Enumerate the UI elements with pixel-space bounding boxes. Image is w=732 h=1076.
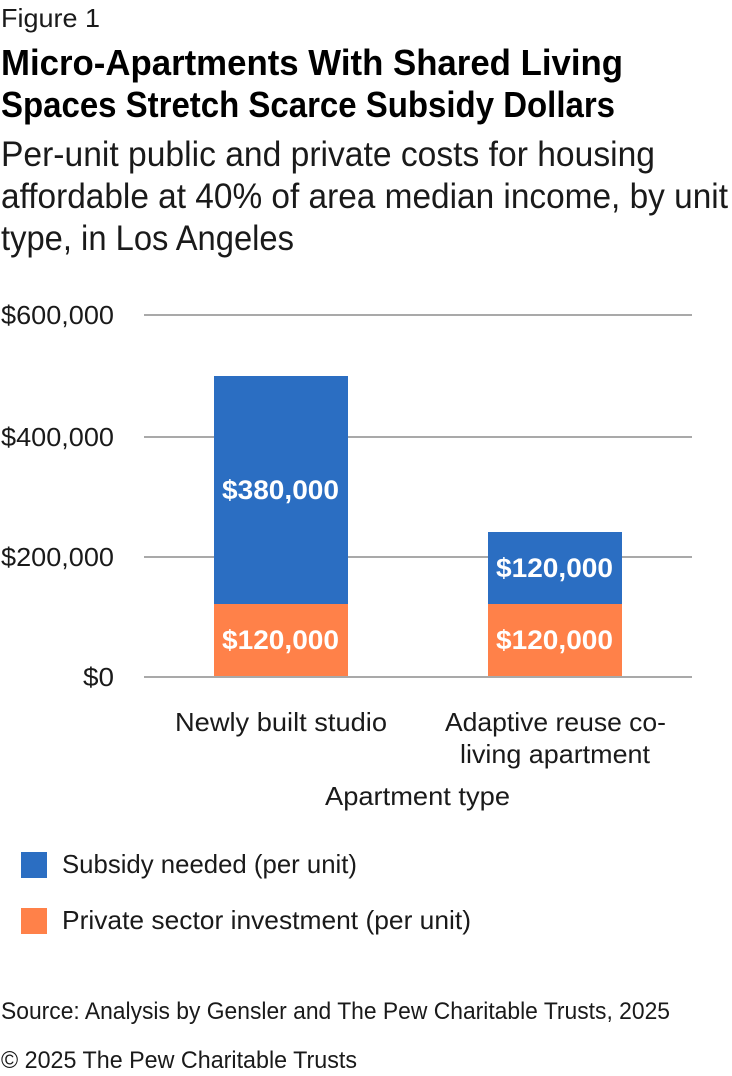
subtitle xyxy=(1,135,728,258)
legend xyxy=(21,849,471,935)
y-axis labels: $0 xyxy=(83,662,114,692)
x-axis title: Apartment type xyxy=(325,781,510,811)
bar: newly built studio: $380,000 xyxy=(222,475,339,505)
x-axis category labels: Adaptive reuse co- xyxy=(445,707,666,737)
subtitle: type, in Los Angeles xyxy=(1,219,294,258)
title: Micro-Apartments With Shared Living xyxy=(1,42,623,83)
y-axis labels: $200,000 xyxy=(1,542,114,572)
legend item: subsidy: Subsidy needed (per unit) xyxy=(62,849,357,879)
source note: Source: Analysis by Gensler and The Pew Charitable Trusts, 2025 xyxy=(1,998,670,1025)
x-axis category labels: living apartment xyxy=(460,739,651,769)
subtitle: Per-unit public and private costs for housing xyxy=(1,135,655,174)
title: Spaces Stretch Scarce Subsidy Dollars xyxy=(1,84,615,125)
copyright: © 2025 The Pew Charitable Trusts xyxy=(1,1047,357,1074)
y-axis labels: $600,000 xyxy=(1,300,114,330)
bar: adaptive reuse co-living apartment: $120,000 xyxy=(496,625,613,655)
figure label: Figure 1 xyxy=(1,3,100,33)
x-axis category labels: Newly built studio xyxy=(175,707,387,737)
bar: newly built studio xyxy=(214,376,348,676)
legend item: private investment: Private sector investment (per unit) xyxy=(62,905,471,935)
bar: newly built studio: $120,000 xyxy=(222,625,339,655)
y-axis labels xyxy=(1,300,114,692)
bar chart xyxy=(1,300,692,811)
title xyxy=(1,42,623,125)
bar: adaptive reuse co-living apartment: $120,000 xyxy=(496,553,613,583)
y-axis labels: $400,000 xyxy=(1,422,114,452)
x-axis category labels xyxy=(175,707,666,769)
bar: adaptive reuse co-living apartment xyxy=(488,532,622,676)
